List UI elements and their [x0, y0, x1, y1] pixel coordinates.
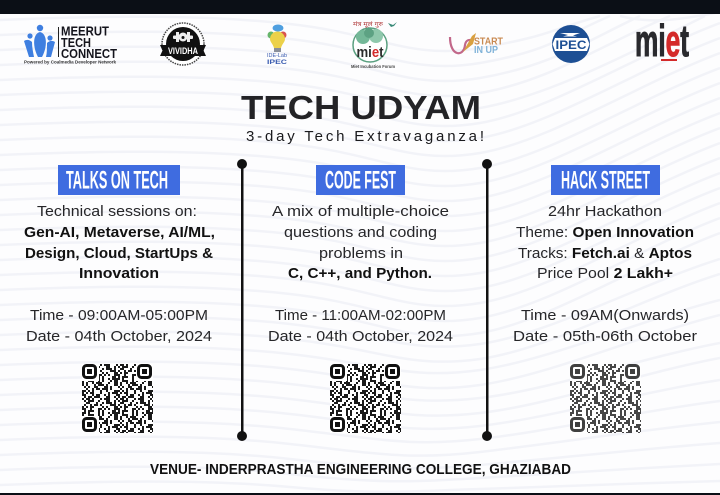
- schedule: Time - 09AM(Onwards): [521, 307, 689, 324]
- logo: Start in UP: START: [474, 36, 503, 48]
- heading: hack street: [551, 165, 660, 195]
- top dark bar: [0, 0, 720, 14]
- schedule: Date - 04th October, 2024: [268, 328, 453, 345]
- schedule: Date - 04th October, 2024: [26, 328, 212, 345]
- description: A mix of multiple-choice: [272, 203, 449, 220]
- logo: MIET: miet: [635, 17, 689, 66]
- QR code: [82, 364, 153, 433]
- title: TECH UDYAM: [241, 89, 481, 126]
- description: [516, 203, 694, 282]
- logo: Vividha: VIVIDHA: [168, 46, 198, 56]
- panel: hack street: [513, 165, 697, 433]
- logo: idea lab IPEC: [267, 24, 288, 66]
- logo: MIET incubation forum: [351, 21, 397, 69]
- logo: Meerut Tech Connect: TECH: [61, 36, 91, 50]
- logo: IPEC: IPEC: [556, 38, 587, 52]
- logo: Start in UP: [450, 33, 503, 56]
- heading: talks on tech: [58, 165, 180, 195]
- description: [272, 203, 449, 282]
- schedule: Date - 05th-06th October: [513, 328, 697, 345]
- venue: VENUE- INDERPRASTHA ENGINEERING COLLEGE, GHAZIABAD: [150, 461, 571, 478]
- logo: MIET incubation forum: Miet Incubation Forum: [351, 64, 395, 69]
- schedule: Time - 11:00AM-02:00PM: [275, 307, 446, 324]
- description: C, C++, and Python.: [288, 265, 432, 282]
- QR code: [570, 364, 641, 433]
- bottom dark bar: [0, 493, 720, 495]
- schedule: [26, 307, 212, 345]
- logo: Meerut Tech Connect: MEERUT: [61, 24, 109, 38]
- description: Theme: Open Innovation: [516, 224, 694, 241]
- heading: code fest: [316, 165, 405, 195]
- panel: talks on tech: [24, 165, 215, 433]
- description: Price Pool 2 Lakh+: [537, 265, 673, 282]
- logo: Start in UP: IN UP: [474, 45, 498, 56]
- logo: Vividha: [160, 23, 206, 65]
- panel: code fest: [268, 165, 453, 433]
- logo: Meerut Tech Connect: Powered by Coalmedia Developer Network: [24, 60, 116, 64]
- description: questions and coding: [284, 224, 437, 241]
- description: Design, Cloud, StartUps &: [25, 245, 213, 262]
- logo: idea lab IPEC: IDE-Lab: [267, 53, 287, 59]
- subtitle: 3-day Tech Extravaganza!: [246, 128, 484, 145]
- logo: IPEC: [552, 25, 590, 63]
- description: problems in: [319, 245, 403, 262]
- description: Technical sessions on:: [37, 203, 197, 220]
- description: 24hr Hackathon: [548, 203, 662, 220]
- heading: talks on tech: TALKS ON TECH: [66, 166, 168, 194]
- logo: MIET incubation forum: miet: [356, 44, 384, 61]
- description: [24, 203, 215, 282]
- heading: code fest: CODE FEST: [325, 166, 396, 194]
- divider left: [237, 159, 247, 441]
- schedule: [513, 307, 697, 345]
- schedule: Time - 09:00AM-05:00PM: [30, 307, 208, 324]
- description: Tracks: Fetch.ai & Aptos: [518, 245, 692, 262]
- description: Innovation: [79, 265, 159, 282]
- schedule: [268, 307, 453, 345]
- QR code: [330, 364, 401, 433]
- logo: Meerut Tech Connect: [24, 24, 117, 64]
- logo: MIET incubation forum: मंत्र मूलं गुरु: [353, 21, 383, 28]
- logo: Meerut Tech Connect: CONNECT: [61, 47, 117, 61]
- description: Gen-AI, Metaverse, AI/ML,: [24, 224, 215, 241]
- divider right: [482, 159, 492, 441]
- logo: idea lab IPEC: IPEC: [267, 60, 288, 66]
